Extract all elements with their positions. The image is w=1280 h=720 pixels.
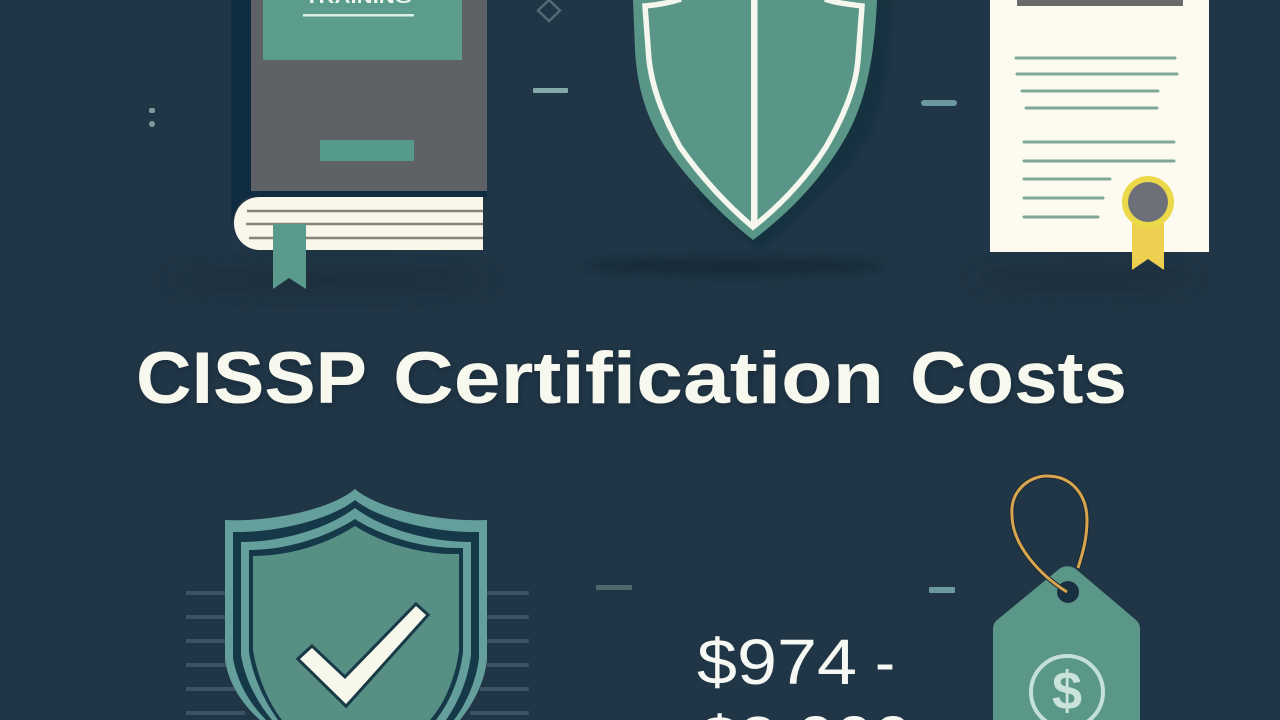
- dash: lower middle: [596, 585, 632, 590]
- check mark: [300, 606, 426, 704]
- price range: -: [875, 626, 895, 698]
- tag string: [1012, 476, 1087, 592]
- icon: training book: [231, 0, 487, 289]
- decorative dots: [149, 108, 155, 127]
- price range: $974: [697, 626, 857, 698]
- dollar coin: [1031, 656, 1103, 720]
- icon: price tag: $: [1052, 661, 1082, 720]
- title: Certification: [393, 338, 884, 419]
- icon: diamond: [538, 0, 560, 21]
- icon: price tag: [993, 476, 1140, 720]
- dash: upper right: [921, 100, 957, 106]
- title: CISSP: [136, 338, 367, 419]
- title: [136, 338, 1127, 419]
- dash: upper left: [533, 88, 568, 93]
- icon: upper shield: [587, 0, 891, 274]
- icon: certificate: [973, 0, 1209, 289]
- dash: lower right: [929, 587, 955, 593]
- price range: [698, 636, 904, 720]
- icon: check shield: [186, 489, 529, 720]
- title: Costs: [910, 338, 1127, 419]
